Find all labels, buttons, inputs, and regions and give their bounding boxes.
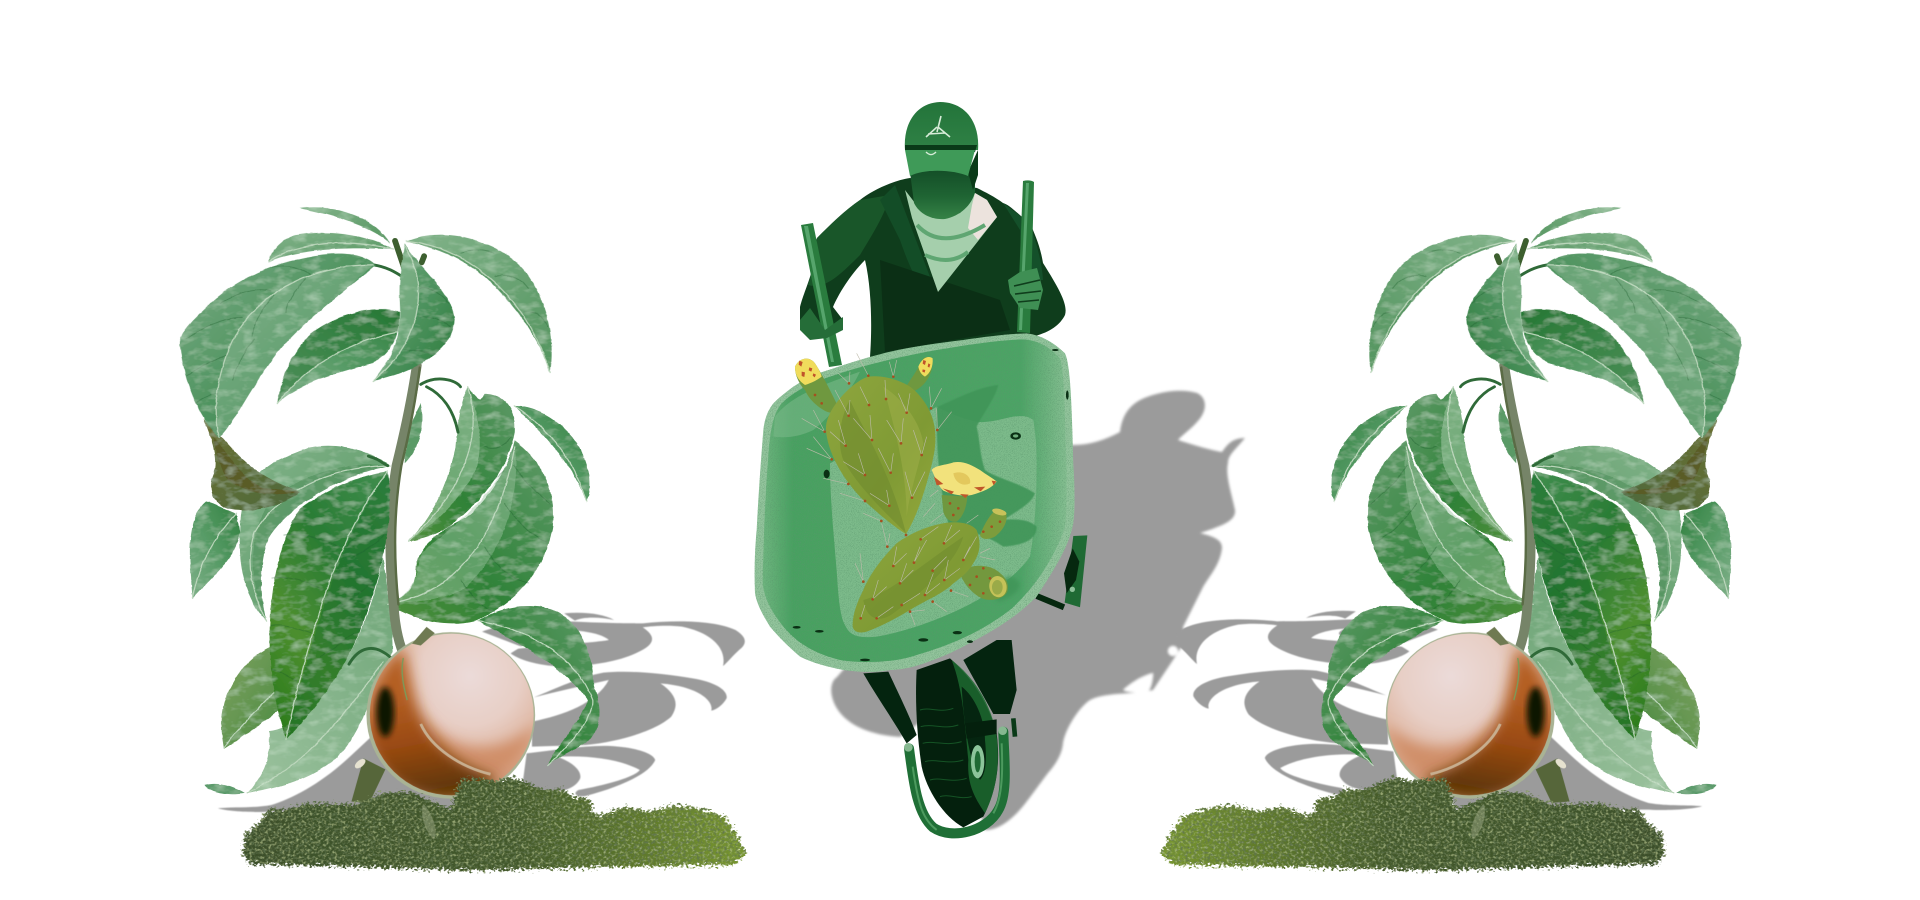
leaves front layer [180,207,552,739]
struts [863,672,917,743]
tire [916,658,998,827]
cut twigs [351,627,435,803]
tray floor [830,407,1037,637]
right peach plant [1321,207,1741,803]
axle [965,719,997,739]
right handle [1017,180,1034,333]
stem and petioles [349,241,460,664]
tray wall [763,339,1067,662]
tray specks [793,349,1069,661]
wheelbarrow rear bracket [1037,535,1087,607]
shadow: right peach plant [1175,611,1702,810]
wheelbarrow wheel and frame [863,640,1017,833]
cactus areoles [815,376,1000,618]
tubular frame [909,732,1005,833]
gardener shadow in tray [937,385,1037,547]
leaves back layer [190,387,600,794]
peach fruit [366,632,538,799]
left handle [801,223,842,367]
cactus: lower pad, buds and flower [853,462,1008,632]
shadow: gardener and wheelbarrow [831,391,1245,830]
left peach plant [180,207,600,803]
cactus spines [802,353,995,625]
left moss ground [243,777,746,871]
body: dark cardigan [800,178,1066,357]
left hand [800,308,843,340]
wheelbarrow tray [755,333,1075,672]
cactus: upper pad [795,357,935,534]
right moss ground [1161,777,1664,871]
gardener [800,102,1066,367]
shadow: left peach plant [218,613,745,812]
face [910,168,975,219]
right hand [1008,268,1043,310]
cap [905,102,978,150]
shirt [905,190,997,292]
